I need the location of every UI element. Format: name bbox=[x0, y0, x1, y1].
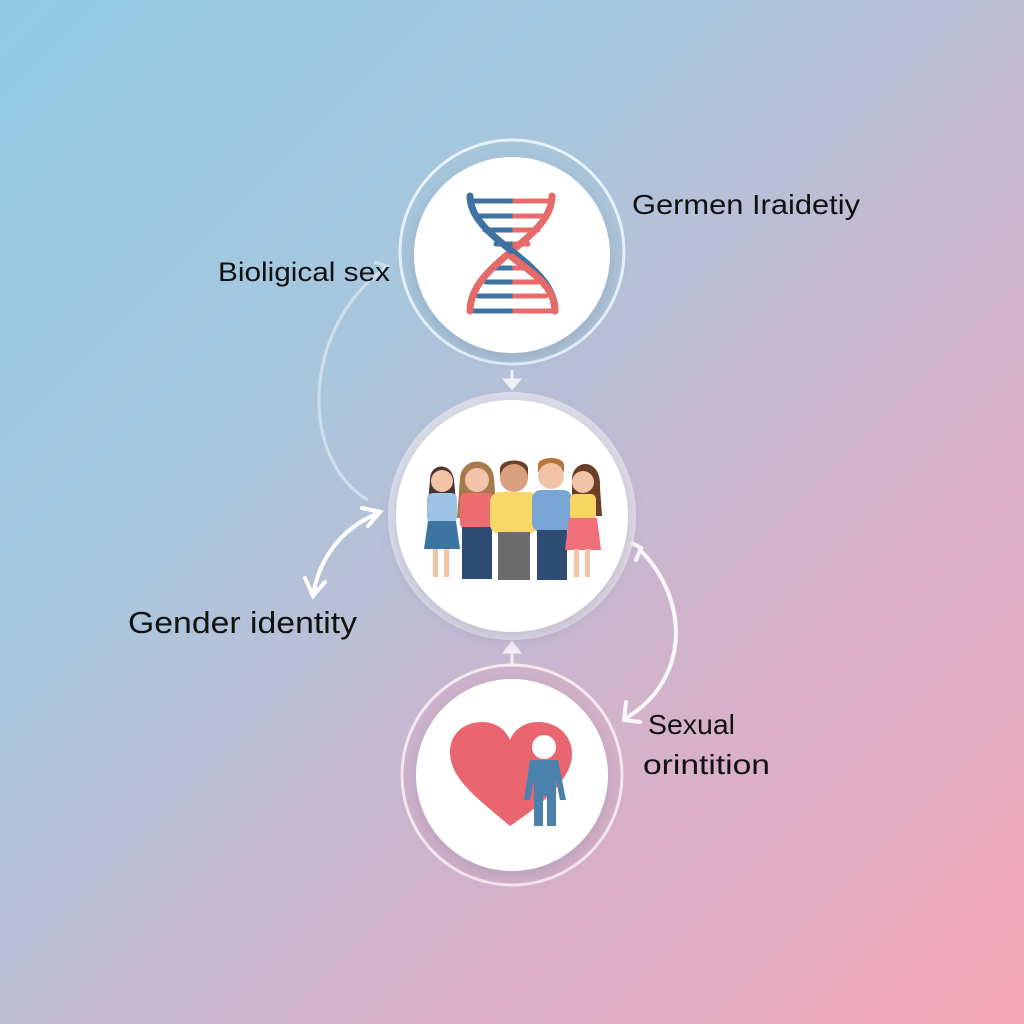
arrow: right arc sexual orientation bbox=[624, 543, 676, 722]
icon: DNA helix bbox=[470, 196, 555, 311]
label: Gender identity: Gender identity bbox=[128, 605, 358, 640]
circle: DNA bbox=[400, 140, 624, 364]
label: Germen Iraidetiy: Germen Iraidetiy bbox=[632, 189, 860, 220]
label: Sexual orientation bbox=[643, 709, 770, 780]
label: Biological sex: Bioligical sex bbox=[218, 257, 391, 287]
icon: heart with person bbox=[450, 722, 572, 826]
arrow: down from DNA bbox=[505, 370, 519, 388]
circle: heart bbox=[402, 665, 622, 885]
icon: group of people bbox=[424, 458, 602, 580]
arrow: up to people bbox=[505, 643, 519, 664]
arrow: gender identity double arrow bbox=[305, 508, 380, 596]
circle: people bbox=[388, 392, 636, 640]
label: Sexual orientation: Sexual bbox=[648, 709, 735, 740]
label: Sexual orientation: orintition bbox=[643, 749, 770, 780]
arrow: left arc biological sex bbox=[319, 262, 387, 500]
